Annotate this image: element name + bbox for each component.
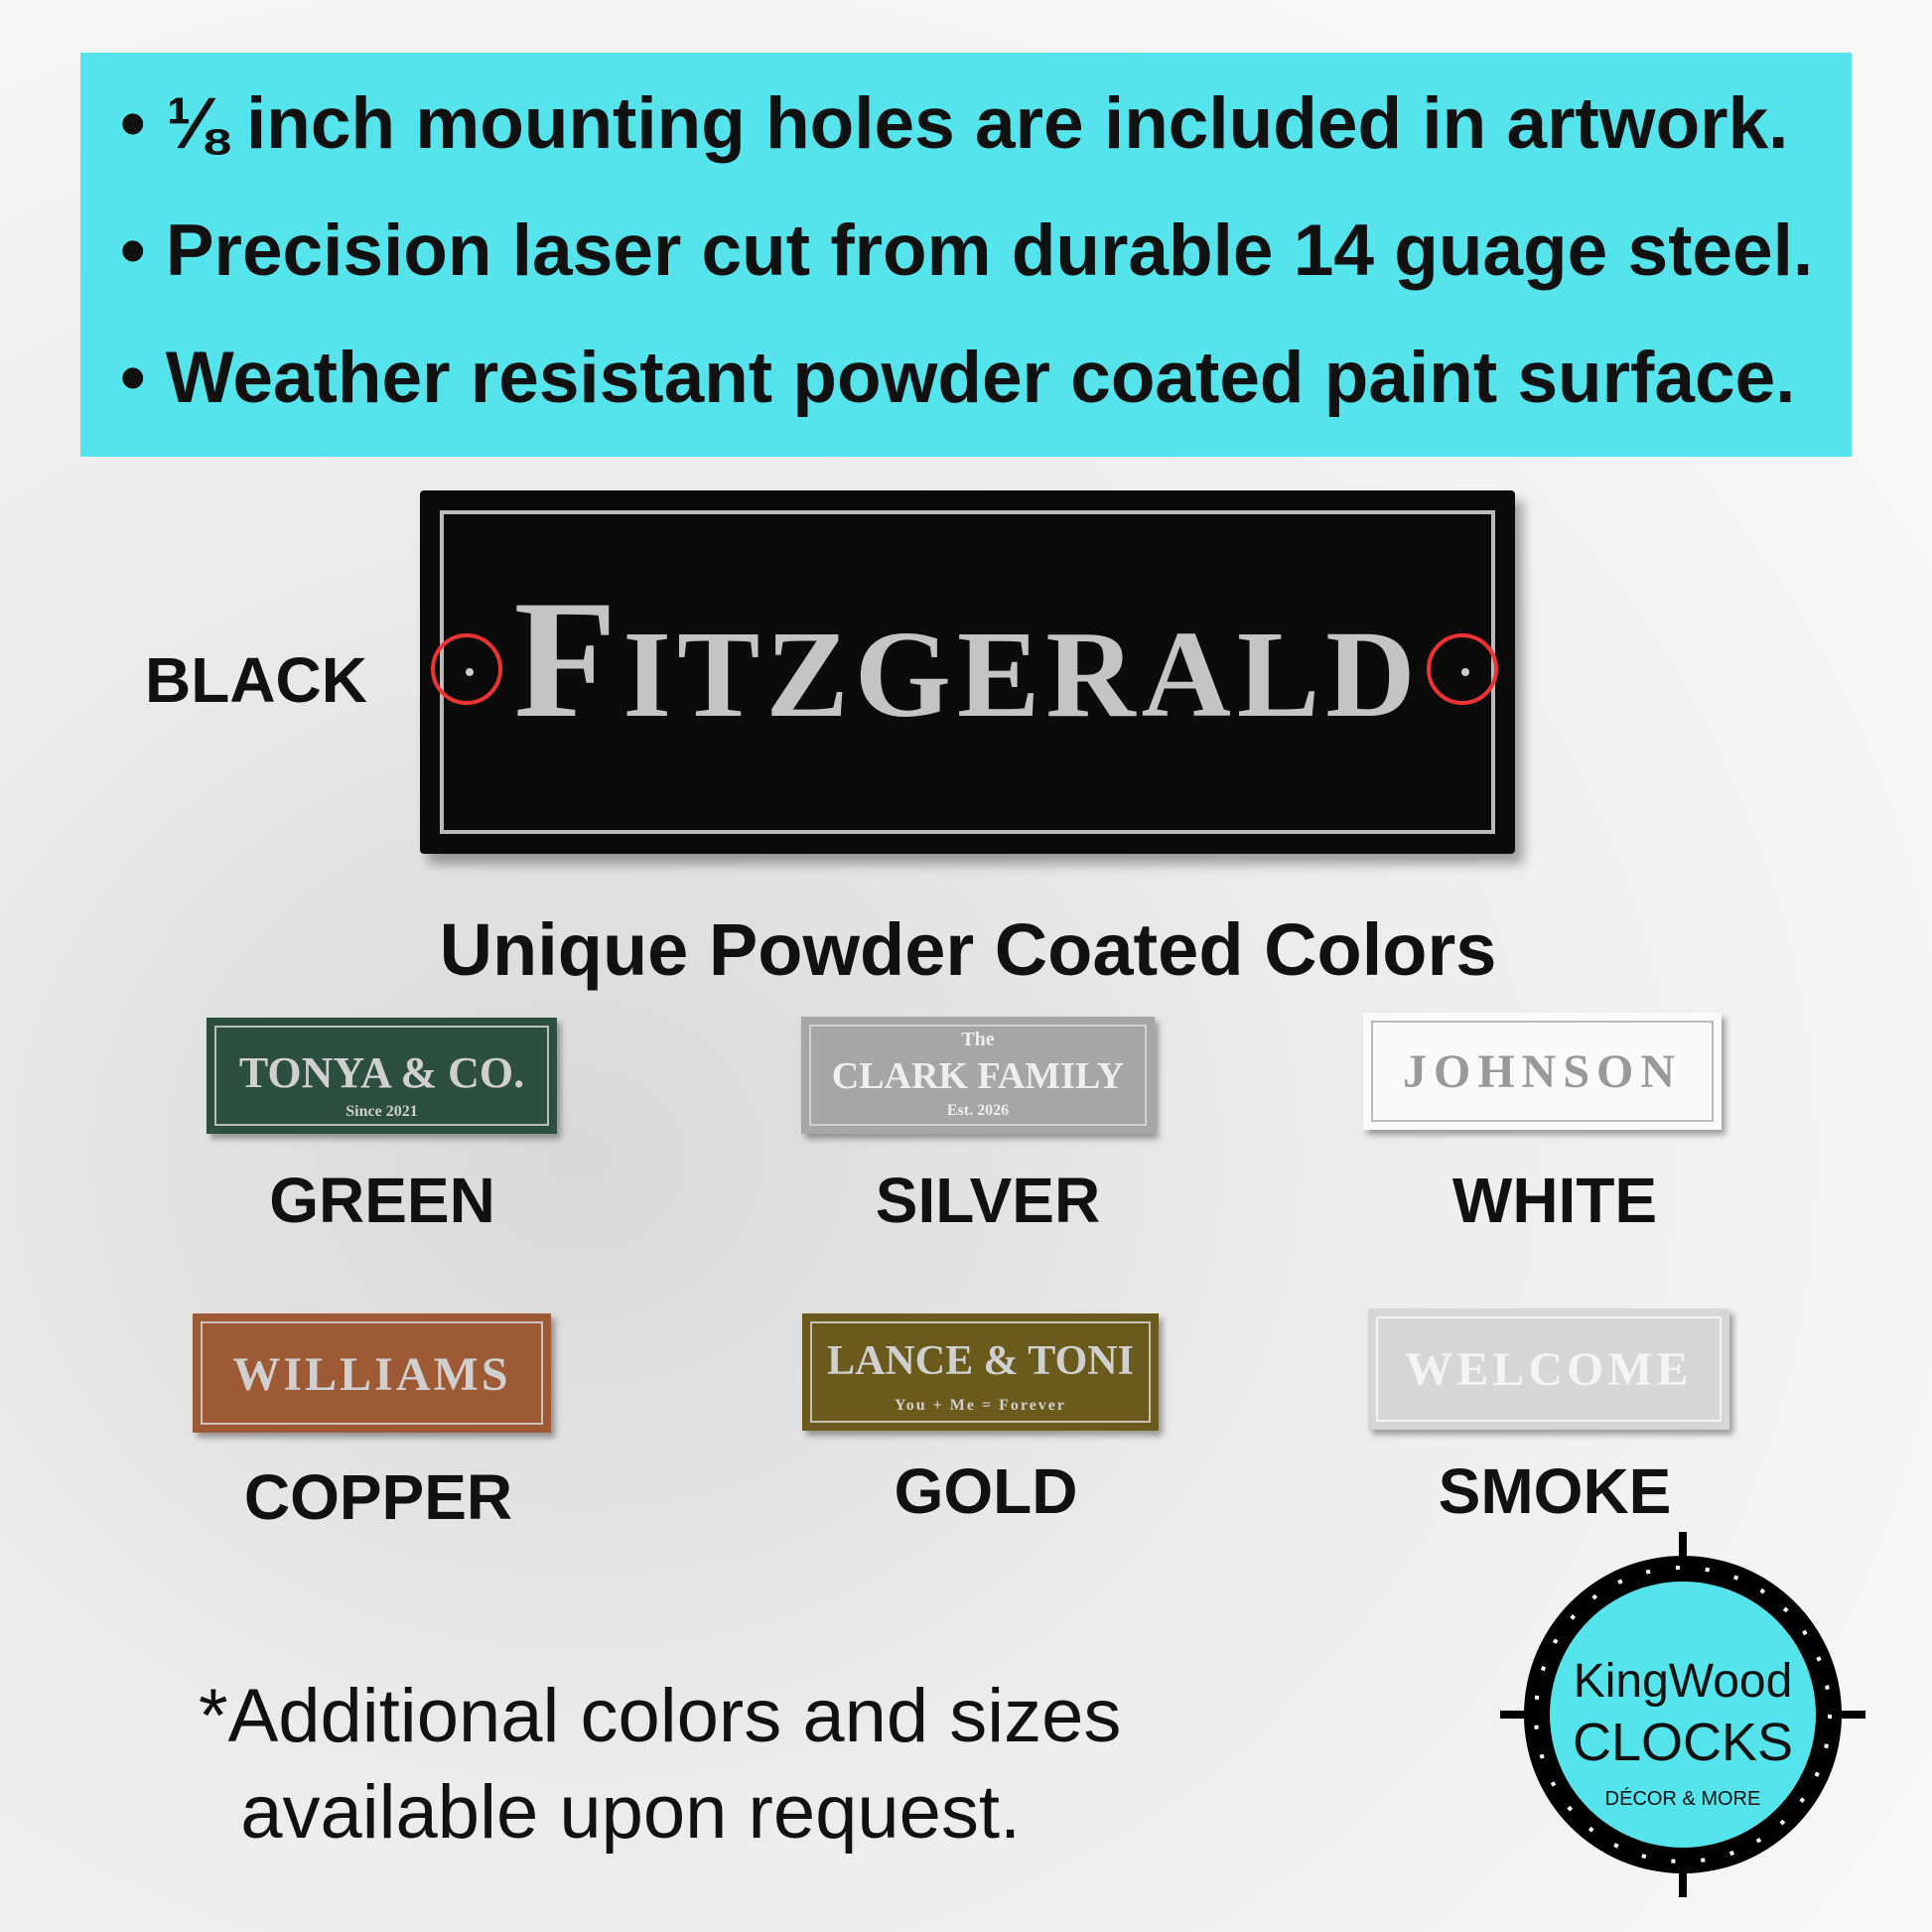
sign: white xyxy=(1363,1013,1722,1130)
sign: green xyxy=(207,1018,557,1134)
icon: mounting hole right xyxy=(1427,633,1498,705)
label: smoke: SMOKE xyxy=(1439,1455,1671,1527)
logo: KingWood Clocks xyxy=(1500,1532,1865,1897)
label: black: BLACK xyxy=(145,644,367,716)
sign: silver: The xyxy=(961,1029,995,1050)
sign text: FITZGERALD xyxy=(513,566,1422,753)
label: green: GREEN xyxy=(269,1165,495,1236)
bullet 2: • Precision laser cut from durable 14 guage steel. xyxy=(120,210,1813,291)
sign: gold xyxy=(802,1313,1159,1431)
sign: gold: You + Me = Forever xyxy=(895,1397,1066,1414)
sign: smoke xyxy=(1368,1309,1729,1430)
logo: KingWood Clocks: KingWood xyxy=(1574,1655,1792,1708)
sign: silver: CLARK FAMILY xyxy=(832,1055,1124,1097)
sign: silver: Est. 2026 xyxy=(947,1102,1009,1119)
sign: copper xyxy=(193,1313,551,1433)
sign: smoke: WELCOME xyxy=(1405,1343,1693,1396)
logo: KingWood Clocks: DÉCOR & MORE xyxy=(1605,1787,1760,1810)
sign: silver xyxy=(801,1017,1155,1134)
footnote: *Additional colors and sizes xyxy=(199,1674,1121,1758)
label: gold: GOLD xyxy=(895,1455,1077,1527)
sign: white: JOHNSON xyxy=(1403,1045,1682,1098)
bullet 3: • Weather resistant powder coated paint surface. xyxy=(120,338,1795,418)
sign: green: TONYA & CO. xyxy=(239,1048,524,1097)
icon: mounting hole left xyxy=(431,633,502,705)
panel: features xyxy=(80,53,1852,457)
heading: colors: Unique Powder Coated Colors xyxy=(440,908,1496,991)
footnote xyxy=(199,1674,1121,1855)
footnote: available upon request. xyxy=(240,1770,1021,1855)
label: copper: COPPER xyxy=(244,1461,512,1533)
logo: KingWood Clocks: CLOCKS xyxy=(1573,1713,1793,1772)
label: white: WHITE xyxy=(1452,1165,1657,1236)
sign: copper: WILLIAMS xyxy=(232,1348,511,1401)
bullet 1: • ⅛ inch mounting holes are included in artwork. xyxy=(120,83,1788,164)
sign: black Fitzgerald xyxy=(420,490,1515,854)
label: silver: SILVER xyxy=(876,1165,1100,1236)
sign: green: Since 2021 xyxy=(345,1103,418,1120)
sign: gold: LANCE & TONI xyxy=(827,1338,1134,1384)
